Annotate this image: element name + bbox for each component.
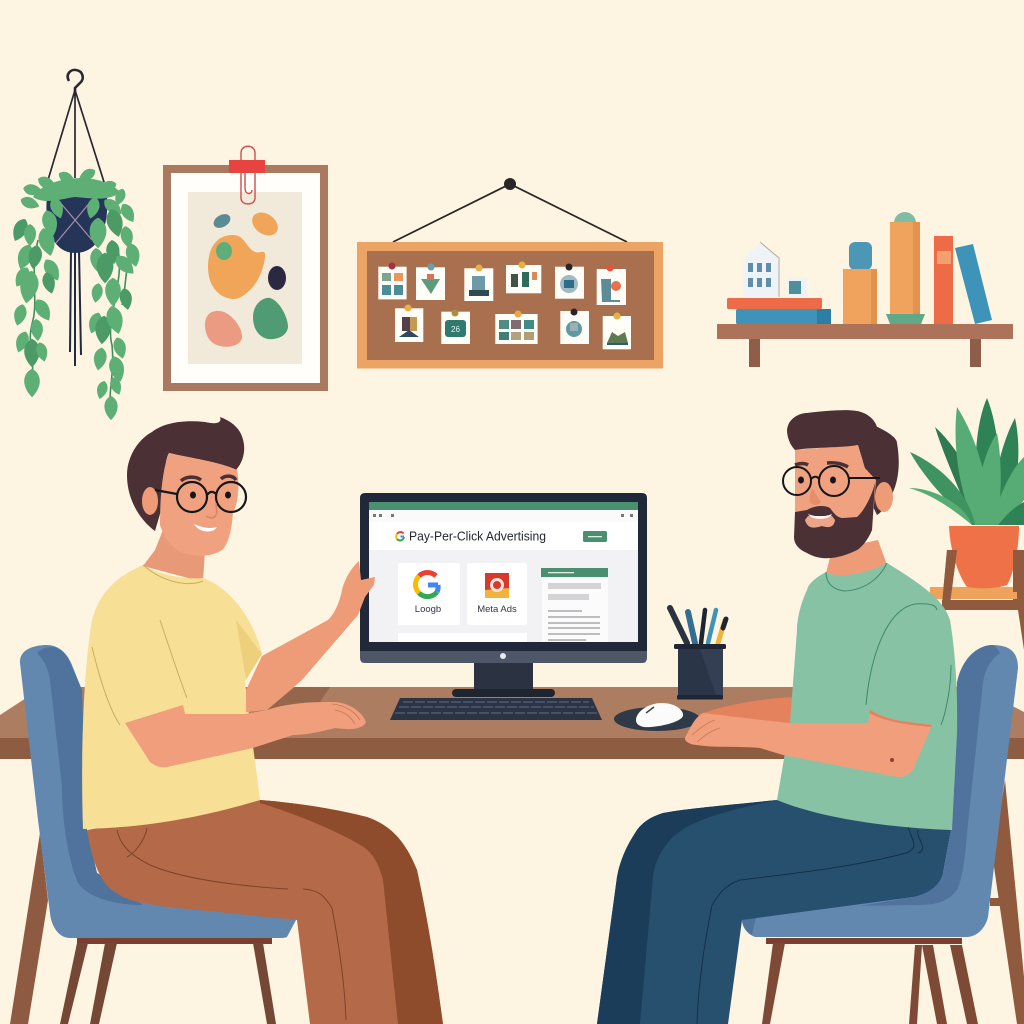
leaves — [9, 166, 143, 420]
google mini logo — [396, 532, 404, 540]
brown trousers — [87, 800, 443, 1024]
shelf brackets — [749, 339, 981, 367]
eyebrows — [181, 476, 236, 481]
arm shadow on desk — [267, 687, 330, 710]
hanging cork board — [357, 178, 663, 368]
nail — [504, 178, 516, 190]
browser toolbar — [369, 510, 638, 522]
finger lines — [692, 720, 720, 742]
stand legs — [942, 550, 1024, 1024]
note cards — [378, 265, 631, 349]
glasses — [155, 482, 246, 512]
face — [160, 453, 238, 556]
smile — [194, 524, 217, 532]
teal pebble — [211, 211, 233, 231]
yellow t-shirt — [82, 565, 262, 829]
shirt collar and seams — [92, 565, 203, 725]
chair shell — [742, 645, 1018, 937]
leaning blue book — [955, 244, 992, 324]
right man — [597, 410, 957, 1024]
chair inner shadow — [37, 647, 143, 905]
desk top — [0, 687, 1024, 738]
tall orange vase with dome — [886, 212, 925, 324]
navy pebble — [268, 266, 286, 290]
meta ads card — [467, 563, 527, 625]
mouth — [805, 516, 835, 528]
hanging plant — [9, 70, 143, 420]
navy trousers — [597, 800, 951, 1024]
tassels — [70, 250, 81, 366]
glasses — [783, 466, 880, 496]
small orange blob — [248, 208, 282, 240]
shelf board — [717, 324, 1013, 339]
pot cords — [56, 200, 92, 243]
ear — [875, 482, 893, 512]
top hair — [787, 410, 877, 480]
vines — [30, 240, 130, 415]
desk — [0, 687, 1024, 759]
frame — [163, 165, 328, 391]
seat rail — [77, 937, 272, 944]
nose — [810, 488, 821, 505]
left chair — [10, 645, 296, 1024]
resting arm — [125, 702, 366, 767]
green blob — [253, 298, 288, 339]
desk front edge — [0, 738, 1024, 759]
paperclip — [241, 146, 255, 204]
pot — [46, 197, 107, 253]
neck — [143, 530, 205, 582]
right chair — [742, 645, 1018, 1024]
potted plant on stand — [909, 398, 1024, 1024]
art canvas — [188, 192, 302, 364]
google card label: Loogb — [415, 604, 441, 615]
hanging wire — [393, 184, 627, 242]
front stand posts — [942, 550, 1024, 604]
far arm — [703, 697, 795, 725]
eyes — [798, 477, 836, 484]
neck — [826, 540, 887, 590]
screen — [369, 502, 638, 642]
front legs — [60, 943, 276, 1024]
monitor base — [452, 689, 555, 697]
header button — [583, 531, 607, 542]
wall shelf — [717, 212, 1013, 367]
left man — [82, 417, 443, 1024]
large orange blob — [208, 235, 265, 299]
back hair — [860, 420, 899, 515]
note contents — [382, 272, 628, 345]
sleeve shading — [236, 620, 262, 680]
eyebrows — [795, 463, 848, 467]
model house — [743, 242, 807, 297]
monitor stand — [474, 662, 533, 690]
stand top — [930, 587, 1017, 599]
finger lines — [332, 704, 360, 724]
partial third card — [398, 633, 527, 642]
cork surface — [367, 251, 654, 360]
green spot — [216, 242, 232, 260]
meta card label: Meta Ads — [477, 604, 517, 615]
salmon blob — [205, 311, 242, 347]
push pins — [388, 262, 620, 320]
white mat — [171, 173, 320, 383]
meta icon — [485, 573, 509, 598]
orange box with blue canister — [843, 242, 877, 324]
pen holder — [670, 608, 726, 700]
hair — [127, 417, 244, 531]
note contents: 26 — [451, 325, 460, 334]
monitor bezel — [360, 493, 647, 651]
hanger strings — [48, 90, 104, 182]
nose — [206, 503, 217, 518]
hook — [68, 70, 83, 92]
sleeve cuff shadow — [869, 710, 932, 727]
mouse and mouse pad — [614, 703, 700, 731]
red clip band — [229, 160, 265, 173]
keyboard — [390, 698, 602, 720]
side panel — [541, 568, 608, 642]
forearm — [685, 710, 932, 777]
legs — [762, 943, 978, 1024]
stand crossbar — [942, 600, 1024, 610]
back leg — [10, 833, 48, 1024]
seat rail — [766, 938, 962, 944]
ear — [142, 487, 158, 515]
board frame — [357, 242, 663, 368]
red upright book — [934, 236, 953, 324]
mole — [890, 758, 894, 762]
power button — [500, 653, 506, 659]
eyes — [190, 492, 231, 498]
page header — [369, 522, 638, 550]
chair inner shadow — [860, 645, 1000, 906]
google ads card — [398, 563, 460, 625]
framed abstract art — [163, 146, 328, 391]
green t-shirt — [777, 563, 957, 830]
raised arm and hand — [246, 561, 375, 712]
stacked books — [727, 298, 831, 324]
desktop monitor — [360, 493, 647, 697]
page title: Pay-Per-Click Advertising — [409, 528, 546, 544]
foliage canopy — [33, 178, 120, 201]
pens — [670, 608, 726, 643]
shirt collar and seams — [826, 563, 951, 725]
spiky leaves — [909, 398, 1024, 525]
seat front shadow — [742, 913, 757, 935]
browser green bar — [369, 502, 638, 510]
terracotta pot — [949, 526, 1019, 588]
beard — [794, 483, 875, 558]
pen cup — [678, 647, 723, 696]
face — [795, 445, 876, 550]
toolbar icons — [373, 514, 633, 517]
monitor chin — [360, 648, 647, 663]
google logo — [415, 572, 438, 597]
chair shell — [20, 645, 296, 938]
